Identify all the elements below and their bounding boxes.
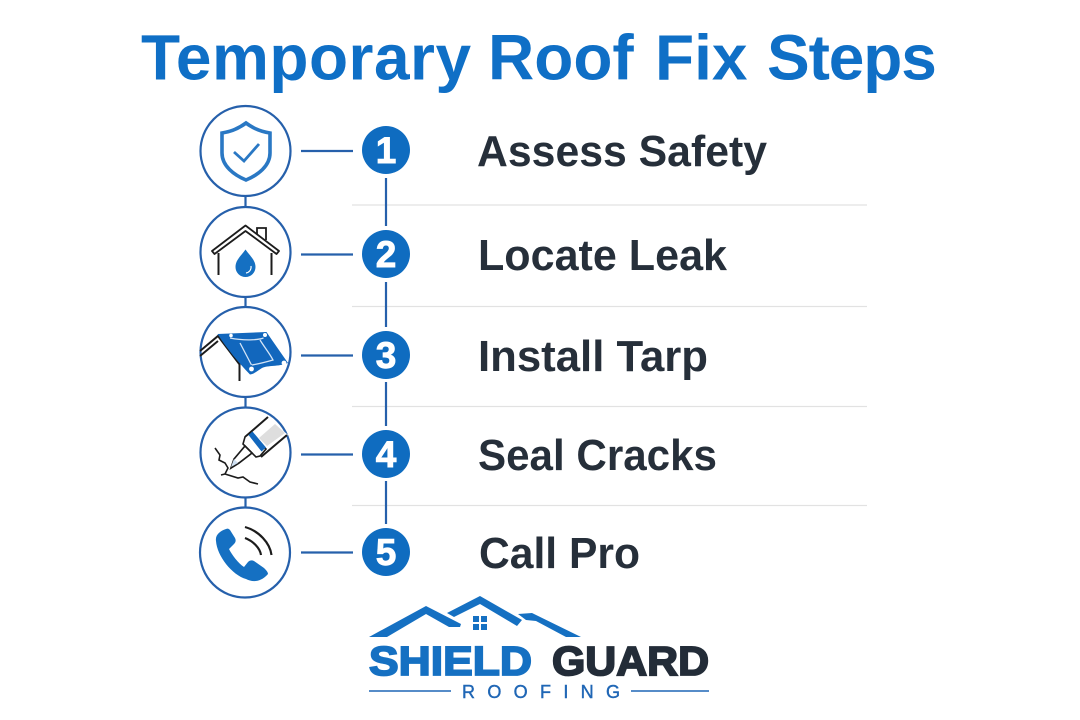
wordmark: guard: GUARD — [552, 638, 709, 684]
title: Temporary — [141, 22, 490, 94]
wordmark: roofing: ROOFING — [462, 682, 620, 702]
step 4: seal cracks — [200, 408, 717, 498]
icon: sealant tube and cracks — [200, 408, 290, 498]
label: locate leak: Locate Leak — [478, 231, 728, 280]
connector 4 — [301, 453, 353, 456]
icon: phone with signal — [200, 508, 290, 598]
number 4: 4 — [376, 434, 397, 475]
title: Steps — [767, 22, 936, 94]
step 1: assess safety — [200, 106, 768, 196]
divider lines — [369, 690, 709, 692]
icon: house with water drop — [200, 207, 290, 297]
number 5: 5 — [376, 532, 396, 573]
step 5: call pro — [200, 508, 640, 598]
number 2 — [362, 230, 410, 278]
number 4 — [362, 430, 410, 478]
number 3: 3 — [376, 335, 396, 376]
number column connectors — [385, 178, 387, 524]
logo: shield guard roofing — [369, 596, 709, 702]
step 2: locate leak — [200, 207, 728, 297]
label: install tarp: Install Tarp — [478, 332, 708, 381]
title: Roof — [488, 22, 652, 94]
wordmark: shield: SHIELD — [369, 638, 532, 684]
step 3: install tarp — [200, 307, 708, 397]
icon: roofline — [369, 596, 581, 637]
icon: tarp on roof — [200, 307, 290, 397]
icon column connectors — [244, 195, 247, 508]
number 2: 2 — [376, 234, 396, 275]
label: seal cracks: Seal Cracks — [478, 431, 717, 480]
title: Fix — [655, 22, 765, 94]
label: assess safety: Assess Safety — [477, 127, 768, 176]
number 5 — [362, 528, 410, 576]
number 1: 1 — [376, 130, 396, 171]
number 3 — [362, 331, 410, 379]
connector 3 — [301, 354, 353, 357]
connector 2 — [301, 253, 353, 256]
label: call pro: Call Pro — [479, 529, 640, 578]
number 1 — [362, 126, 410, 174]
connector 1 — [301, 150, 353, 152]
icon: shield with check — [200, 106, 290, 196]
connector 5 — [301, 551, 353, 554]
